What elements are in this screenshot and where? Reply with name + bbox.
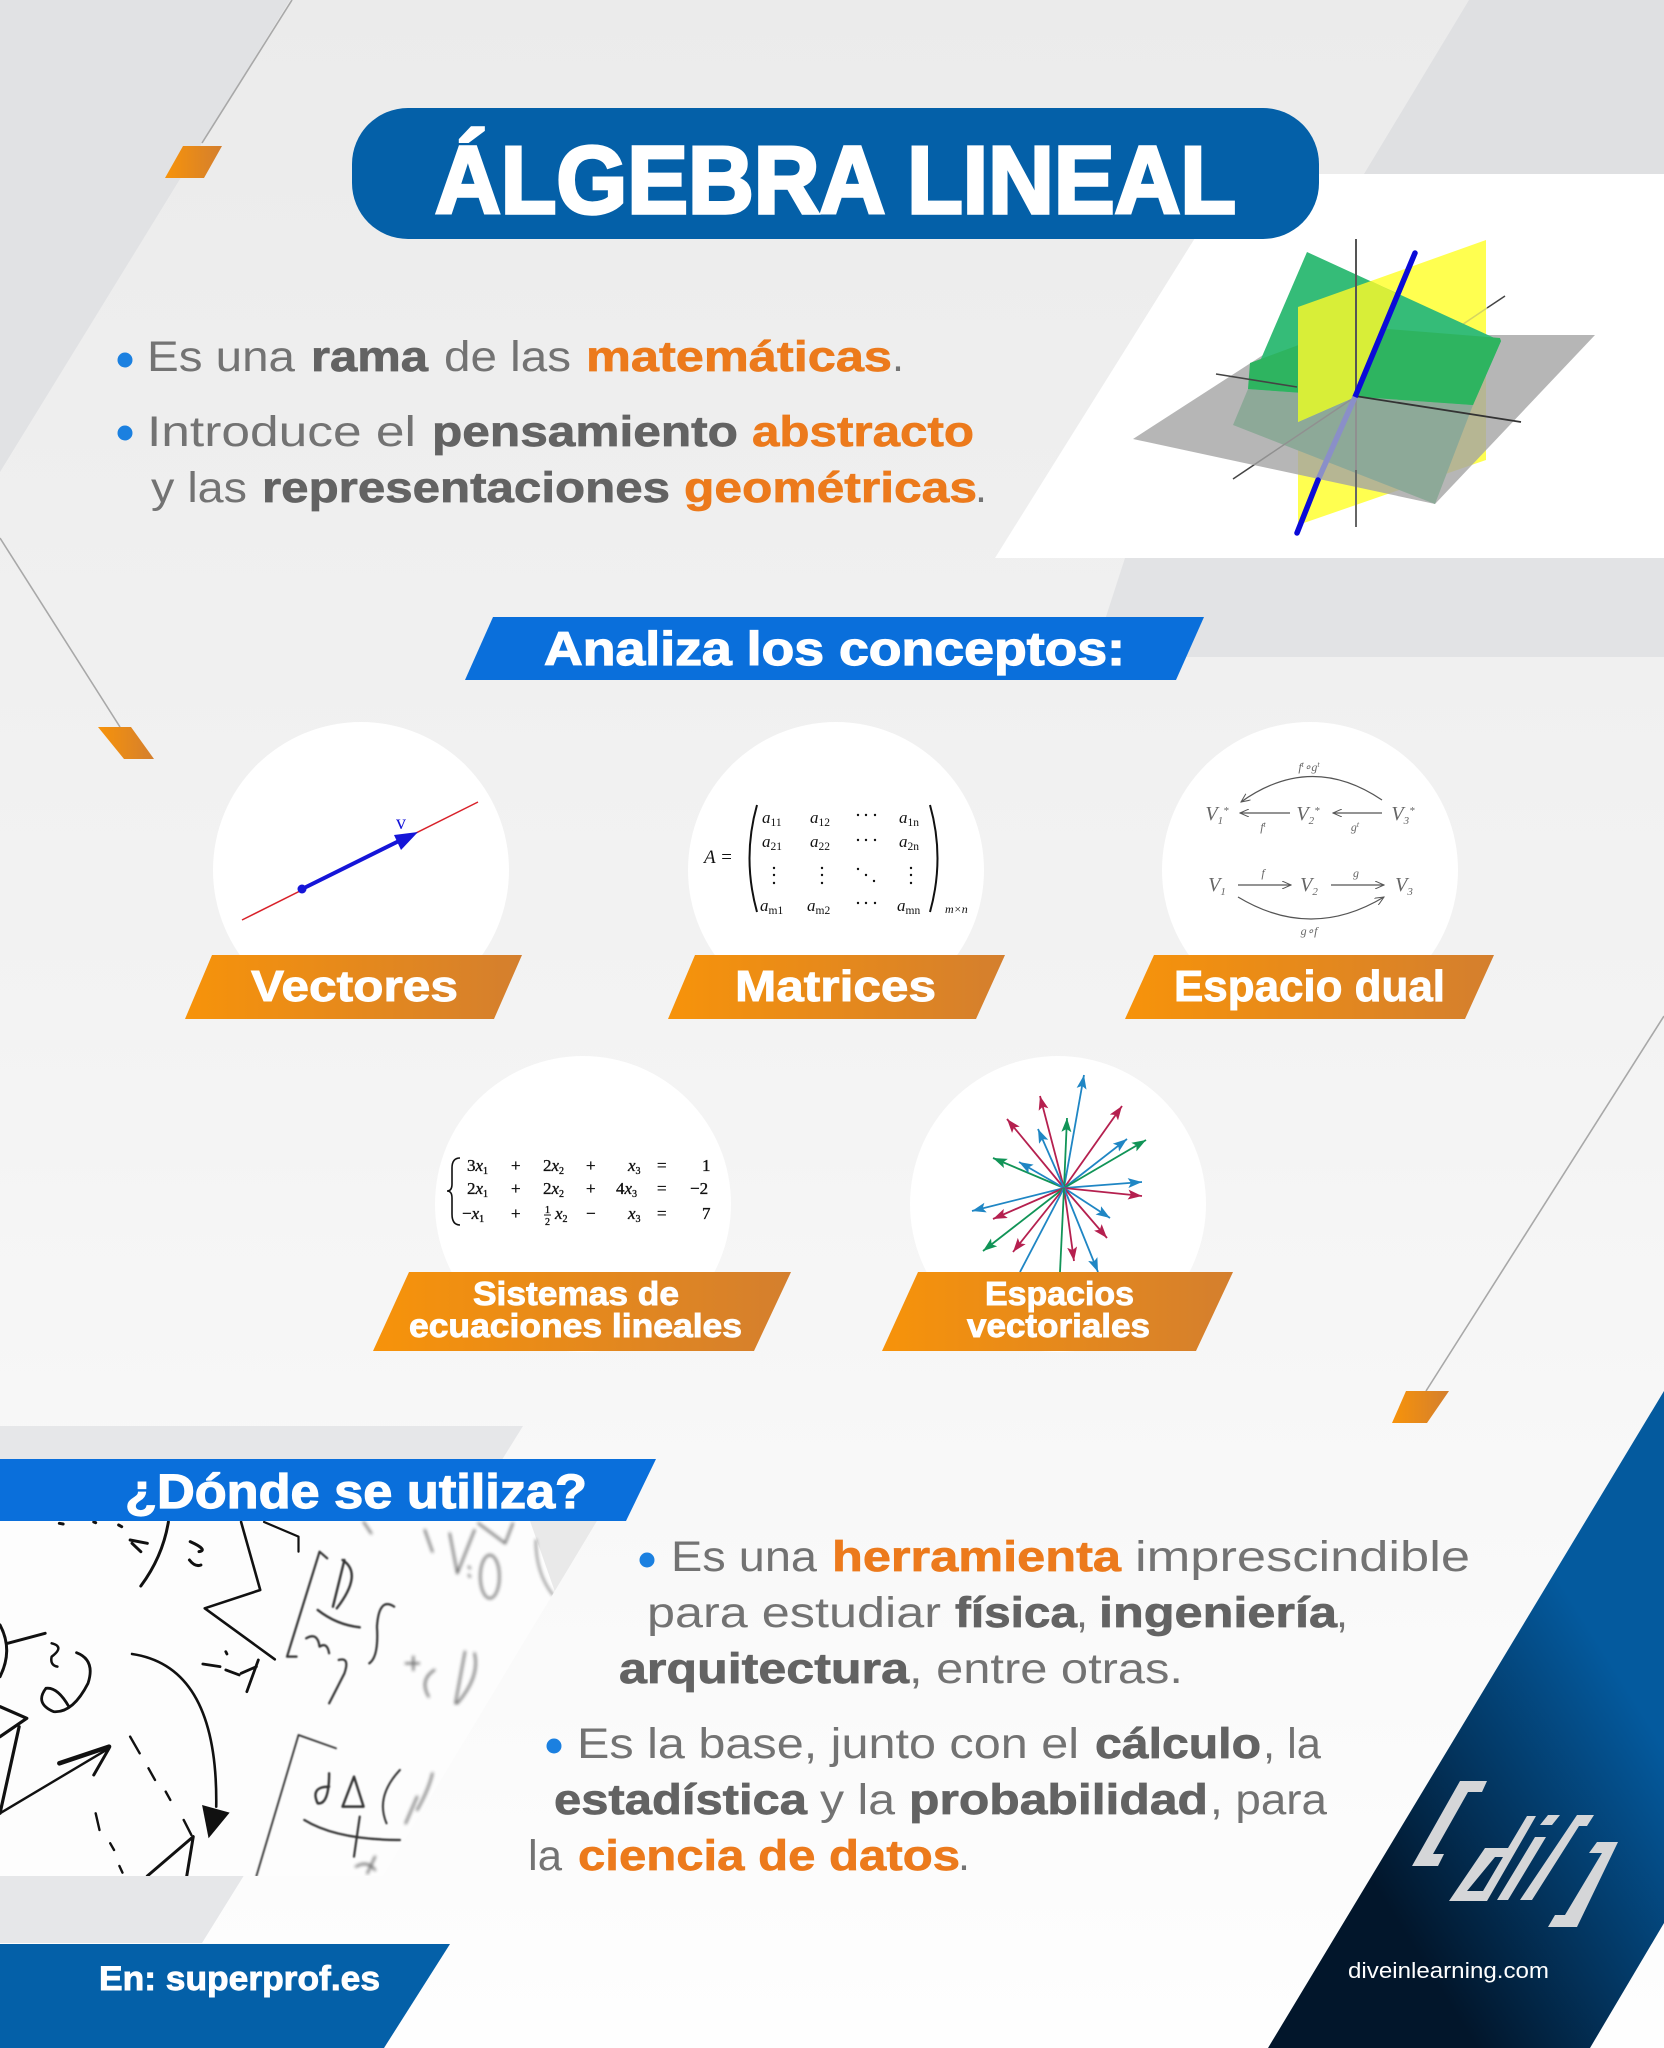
dual space diagram: V xyxy=(1395,874,1407,896)
dual space diagram xyxy=(1205,760,1415,938)
uses text block xyxy=(528,1533,1470,1880)
matrix formula: 11 xyxy=(770,817,782,829)
matrix formula xyxy=(702,805,968,917)
heading: Analiza los conceptos: Analiza los conceptos: xyxy=(544,622,1125,675)
intro text block: rama xyxy=(311,333,429,381)
linear equation system: −2 xyxy=(690,1179,708,1198)
dual space diagram: t xyxy=(1302,760,1305,769)
brand panel: diveinlearning.com xyxy=(1348,1958,1549,1983)
concept: Espacio dual xyxy=(1125,722,1494,1019)
photo: whiteboard with handwritten formulas xyxy=(0,1521,597,1876)
concept: Espacio dual: Espacio dual xyxy=(1174,962,1445,1011)
dual space diagram: * xyxy=(1223,805,1229,817)
linear equation system: 3 xyxy=(632,1189,637,1200)
uses text block: , xyxy=(1336,1589,1348,1637)
uses text block: cálculo xyxy=(1095,1720,1261,1768)
linear equation system: 1 xyxy=(702,1156,710,1175)
linear equation system: 1 xyxy=(479,1214,484,1225)
intro text block: matemáticas xyxy=(586,333,892,381)
vector star xyxy=(972,1075,1146,1272)
linear equation system: 7 xyxy=(702,1204,711,1223)
intro text block: . xyxy=(892,333,904,381)
matrix formula: 12 xyxy=(818,817,830,829)
concept: Vectores xyxy=(185,722,522,1019)
uses text block: Es una xyxy=(671,1533,817,1581)
matrix formula: 1n xyxy=(908,817,919,829)
linear equation system: 2 xyxy=(559,1189,564,1200)
uses text block: herramienta xyxy=(832,1533,1122,1581)
dual space diagram: V xyxy=(1296,803,1309,825)
matrix formula: a xyxy=(810,832,818,851)
heading: Dónde se utiliza xyxy=(0,1459,656,1521)
linear equation system: −x xyxy=(462,1204,479,1223)
uses text block: para estudiar xyxy=(647,1589,941,1637)
uses text block: , entre otras. xyxy=(909,1645,1183,1693)
vector diagram: v xyxy=(396,812,406,834)
dual space diagram: 3 xyxy=(1406,886,1413,898)
intro text block: Introduce el xyxy=(147,408,416,456)
uses text block: imprescindible xyxy=(1135,1533,1470,1581)
uses text block: ciencia de datos xyxy=(578,1832,960,1880)
linear equation system: 1 xyxy=(483,1189,488,1200)
dual space diagram: 2 xyxy=(1309,815,1315,827)
dual space diagram: g xyxy=(1351,820,1357,834)
linear equation system: 2x xyxy=(543,1179,559,1198)
uses text block: Es la base, junto con el xyxy=(577,1720,1079,1768)
intro text block: representaciones xyxy=(262,464,670,512)
matrix formula: 2n xyxy=(908,841,919,853)
uses text block: física xyxy=(955,1589,1078,1637)
intro text block: geométricas xyxy=(684,464,977,512)
intro text block: Es una xyxy=(147,333,295,381)
accent: left orange parallelogram xyxy=(98,727,154,759)
linear equation system: 3 xyxy=(636,1214,641,1225)
matrix formula: a xyxy=(899,808,908,827)
matrix formula: a xyxy=(897,896,906,915)
uses text block: y la xyxy=(820,1776,895,1824)
linear equation system: = xyxy=(657,1179,667,1198)
dual space diagram: t xyxy=(1264,820,1267,829)
concept: Vectores: Vectores xyxy=(251,962,458,1011)
linear equation system: x xyxy=(554,1204,563,1223)
linear equation system: 3 xyxy=(636,1166,641,1177)
intro text block: pensamiento xyxy=(432,408,738,456)
brand panel xyxy=(1268,1391,1664,2048)
linear equation system xyxy=(447,1156,711,1228)
matrix formula: a xyxy=(762,832,770,851)
source banner xyxy=(0,1944,450,2048)
linear equation system: + xyxy=(511,1204,521,1223)
intro text block: de las xyxy=(444,333,571,381)
dual space diagram: V xyxy=(1208,874,1220,896)
dual space diagram: 3 xyxy=(1403,815,1410,827)
uses text block: , la xyxy=(1263,1720,1321,1768)
title: ÁLGEBRA LINEAL xyxy=(435,127,1236,234)
uses text block: . xyxy=(958,1832,970,1880)
matrix formula: mn xyxy=(906,905,920,917)
concept: Sistemas de ecuaciones lineales: ecuaciones lineales xyxy=(409,1307,742,1344)
dual space diagram: * xyxy=(1409,805,1415,817)
uses text block: la xyxy=(528,1832,562,1880)
linear equation system: 2 xyxy=(559,1166,564,1177)
dual space diagram: 2 xyxy=(1312,886,1318,898)
linear equation system: x xyxy=(627,1156,636,1175)
linear equation system: 2x xyxy=(467,1179,483,1198)
concept: Espacios vectoriales: vectoriales xyxy=(967,1307,1150,1344)
dual space diagram: g∘f xyxy=(1301,924,1319,938)
linear equation system: 1 xyxy=(545,1205,550,1216)
dual space diagram: 1 xyxy=(1218,815,1223,827)
intro text block xyxy=(118,333,987,512)
concept: Espacios vectoriales: Espacios xyxy=(985,1275,1134,1312)
linear equation system: 2 xyxy=(545,1217,550,1228)
intro text block: . xyxy=(975,464,987,512)
matrix formula: 21 xyxy=(770,841,782,853)
linear equation system: 2x xyxy=(543,1156,559,1175)
matrix formula: m2 xyxy=(816,905,830,917)
dual space diagram: t xyxy=(1317,760,1320,769)
dual space diagram: f xyxy=(1261,866,1266,880)
concept: Sistemas de ecuaciones lineales xyxy=(373,1056,791,1352)
vector diagram xyxy=(242,802,478,920)
dual space diagram: * xyxy=(1314,805,1320,817)
linear equation system: x xyxy=(627,1204,636,1223)
uses text block: estadística xyxy=(554,1776,808,1824)
uses text block: arquitectura xyxy=(619,1645,910,1693)
intro text block: abstracto xyxy=(752,408,974,456)
source banner: En: superprof.es xyxy=(99,1960,380,1998)
uses text block: , xyxy=(1076,1589,1088,1637)
dual space diagram: f xyxy=(1260,820,1264,834)
dual space diagram: g xyxy=(1353,866,1359,880)
matrix formula: m×n xyxy=(945,902,968,916)
matrix formula: a xyxy=(810,808,818,827)
concept: Matrices xyxy=(668,722,1005,1019)
linear equation system: 3x xyxy=(467,1156,483,1175)
concept: Sistemas de ecuaciones lineales: Sistemas de xyxy=(473,1275,679,1312)
dual space diagram: f xyxy=(1298,760,1302,774)
matrix formula: a xyxy=(807,896,816,915)
dual space diagram: ∘g xyxy=(1304,760,1317,774)
matrix formula: A = xyxy=(702,847,733,868)
matrix formula: a xyxy=(899,832,908,851)
linear equation system: − xyxy=(586,1204,596,1223)
matrix formula: 22 xyxy=(818,841,830,853)
dual space diagram: V xyxy=(1300,874,1312,896)
concept: Matrices: Matrices xyxy=(735,962,936,1011)
linear equation system: = xyxy=(657,1204,667,1223)
linear equation system: + xyxy=(511,1179,521,1198)
uses text block: probabilidad xyxy=(909,1776,1208,1824)
uses text block: ingeniería xyxy=(1099,1589,1338,1637)
dual space diagram: V xyxy=(1391,803,1404,825)
linear equation system: + xyxy=(586,1156,596,1175)
matrix formula: m1 xyxy=(768,905,783,917)
linear equation system: 4x xyxy=(616,1179,632,1198)
matrix formula: a xyxy=(762,808,770,827)
heading: Analiza los conceptos xyxy=(465,617,1204,680)
intro text block: y las xyxy=(151,464,247,512)
heading: Dónde se utiliza: ¿Dónde se utiliza? xyxy=(125,1466,587,1519)
accent: right orange parallelogram xyxy=(1392,1391,1449,1423)
3D planes diagram xyxy=(1133,239,1595,533)
concept: Espacios vectoriales xyxy=(882,1056,1233,1352)
accent: top orange parallelogram xyxy=(165,146,222,178)
dual space diagram: t xyxy=(1357,820,1360,829)
icon: dif logo xyxy=(1412,1781,1618,1927)
dual space diagram: V xyxy=(1205,803,1218,825)
linear equation system: + xyxy=(586,1179,596,1198)
matrix formula: a xyxy=(760,896,768,915)
linear equation system: 2 xyxy=(563,1214,568,1225)
uses text block: , para xyxy=(1210,1776,1327,1824)
dual space diagram: 1 xyxy=(1220,886,1226,898)
linear equation system: 1 xyxy=(483,1166,488,1177)
linear equation system: + xyxy=(511,1156,521,1175)
linear equation system: = xyxy=(657,1156,667,1175)
